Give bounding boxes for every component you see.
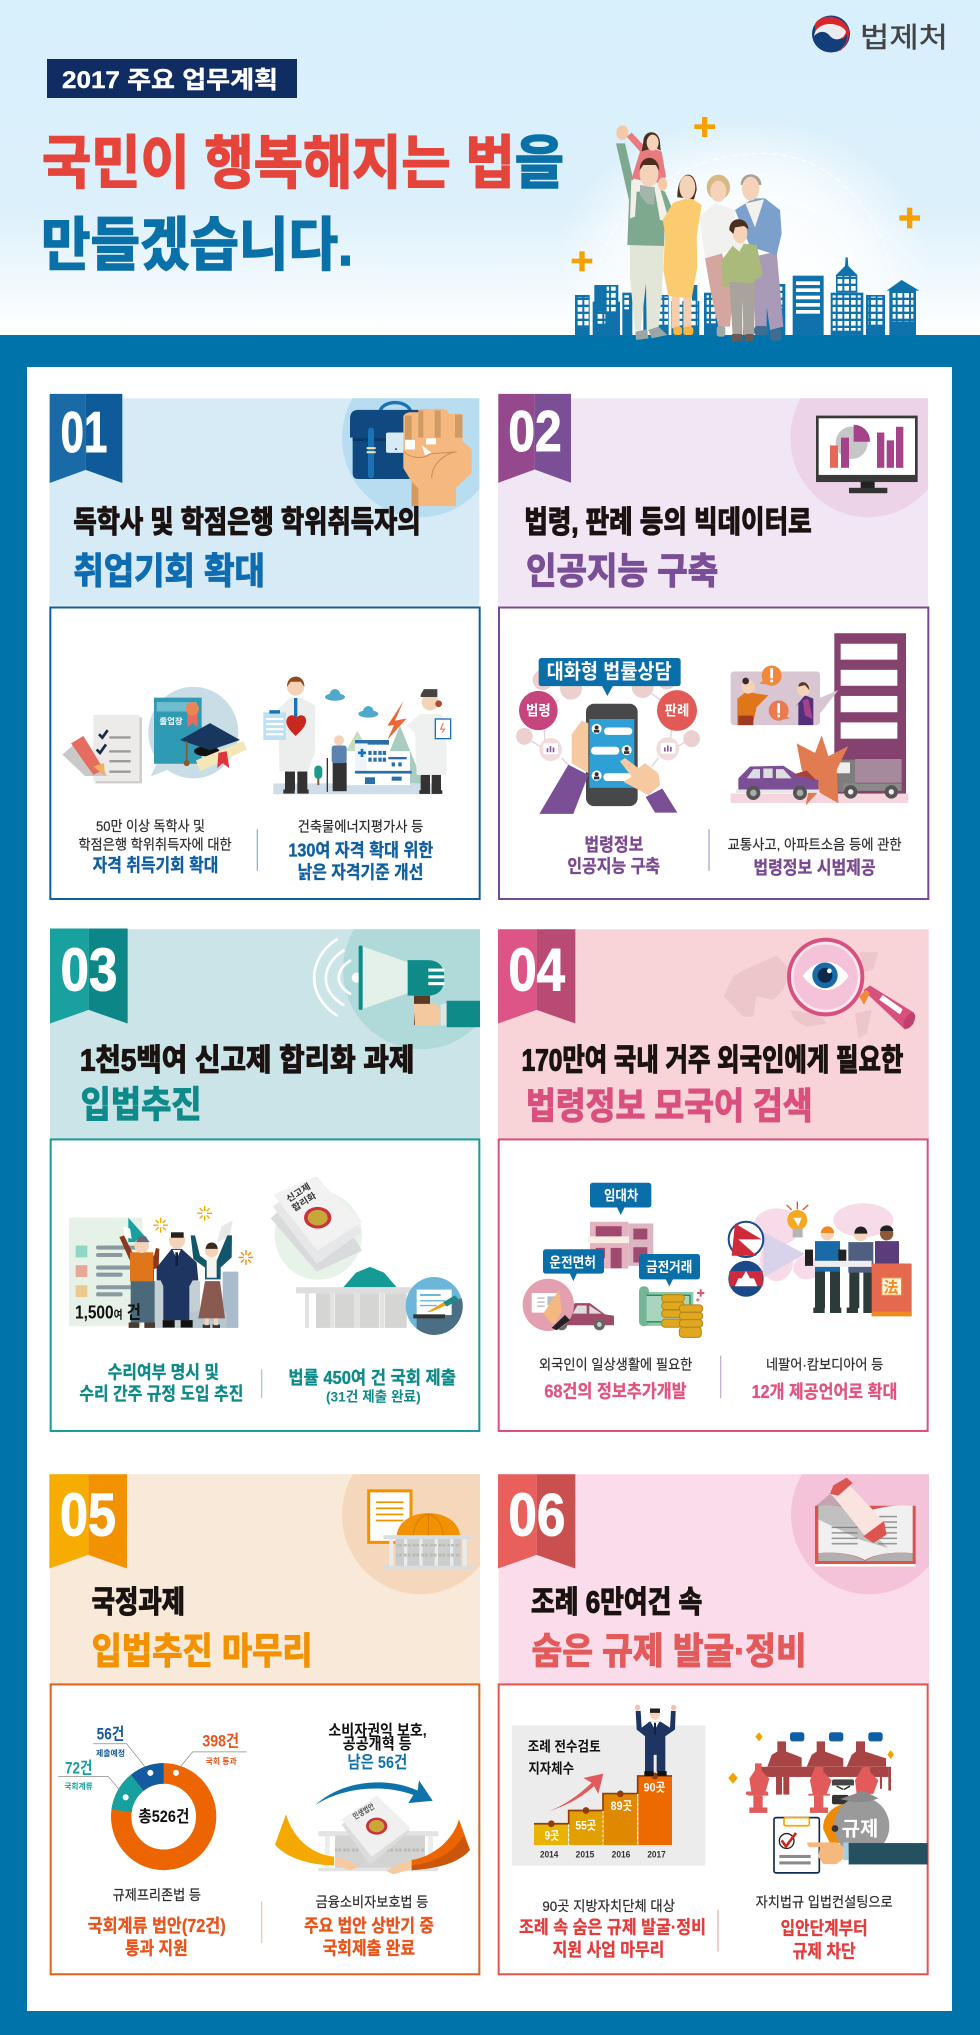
- heading 05: 국정과제: [92, 1585, 185, 1620]
- ribbon number 03: 03: [61, 936, 117, 1003]
- title: 국민이 행복해지는 법을: [42, 131, 564, 196]
- icon: orange plus signs: [572, 117, 920, 271]
- caption 01 right: [288, 818, 434, 882]
- heading 06: [531, 1585, 807, 1672]
- illustration: smartphone legal chatbot: 판례: [665, 703, 689, 719]
- tag: 2017 주요 업무계획: [47, 59, 297, 98]
- illustration: noise dispute and car accident: [731, 633, 908, 805]
- ribbon number 04: 04: [508, 936, 565, 1003]
- caption 06 right: 규제 차단: [793, 1941, 856, 1961]
- caption 05 left: 규제프리존법 등: [113, 1887, 201, 1903]
- icon: book and eraser: [815, 1478, 916, 1566]
- caption 01 right: 낡은 자격기준 개선: [298, 862, 423, 882]
- heading 05: [92, 1585, 313, 1672]
- caption 06 right: 입안단계부터: [781, 1918, 868, 1939]
- ribbon number 05: [49, 1474, 127, 1568]
- caption 05 right: 주요 법안 상반기 중: [304, 1916, 434, 1936]
- icon: diploma and graduation cap: [148, 687, 247, 778]
- bar chart: 조례 전수검토 지자체수: 지자체수: [528, 1760, 574, 1777]
- caption 03 right: 법률 450여 건 국회 제출: [288, 1368, 456, 1388]
- illustration: hands passing bills with arrow: [275, 1780, 470, 1874]
- panel 01 header band: [49, 398, 479, 606]
- heading 02: [524, 505, 812, 591]
- icon: megaphone: [314, 939, 480, 1027]
- caption 04 left: [539, 1356, 692, 1401]
- panel 04 header band: [498, 929, 929, 1139]
- caption 06 left: [519, 1898, 706, 1960]
- caption 01 left: 학점은행 학위취득자에 대한: [78, 836, 232, 853]
- callout: 남은 56건: [328, 1722, 427, 1772]
- caption 03 right: [288, 1368, 456, 1404]
- illustration: sealed bills and National Assembly: 합리화: [290, 1190, 318, 1213]
- illustration: rent, driving licence and finance: 운전면허: [549, 1254, 596, 1271]
- panel 03: [50, 928, 480, 1432]
- donut chart: 총526건: 56건: [97, 1726, 124, 1744]
- ribbon number 01: 01: [61, 400, 107, 465]
- callout: 남은 56건: 소비자권익 보호,: [328, 1722, 427, 1739]
- ribbon number 06: [498, 1474, 575, 1568]
- callout: 남은 56건: 남은 56건: [347, 1753, 407, 1772]
- content box 03: [51, 1139, 479, 1431]
- donut chart: 총526건: 총526건: [138, 1808, 189, 1826]
- ribbon number 06: 06: [508, 1481, 565, 1548]
- icon: diploma and graduation cap: 졸업장: [159, 716, 183, 726]
- illustration: rent, driving licence and finance: 임대차: [604, 1187, 638, 1203]
- boy: [729, 282, 755, 335]
- caption 04 left: 68건의 정보추가개발: [544, 1381, 687, 1401]
- grandmother: [705, 252, 733, 327]
- illustration: rent, driving licence and finance: 금전거래: [646, 1259, 692, 1275]
- caption 05 right: 국회제출 완료: [323, 1938, 415, 1958]
- illustration: regulation blocked at drafting stage: [728, 1732, 928, 1873]
- illustration: smartphone legal chatbot: [516, 658, 700, 814]
- bar chart: 조례 전수검토 지자체수: 90곳: [644, 1780, 665, 1795]
- panel 01: [49, 359, 498, 899]
- caption 05 right: [304, 1894, 434, 1958]
- donut chart: 총526건: 398건: [202, 1732, 239, 1750]
- donut chart: 총526건: 제출예정: [96, 1748, 125, 1758]
- icon: checklist and pencil: [62, 715, 142, 783]
- illustration: 1,500 reports with cheering people: 1,500여 건: [75, 1302, 141, 1322]
- title: 만들겠습니다.: [41, 213, 353, 278]
- illustration: smartphone legal chatbot: 법령: [526, 703, 551, 719]
- illustration: hospital, doctor, nurse and patient: [263, 677, 451, 794]
- caption 06 right: 자치법규 입법컨설팅으로: [756, 1894, 893, 1910]
- ribbon number 01: [50, 394, 122, 483]
- donut chart: 총526건: 국회계류: [64, 1781, 93, 1791]
- caption 02 left: [567, 835, 660, 877]
- heading 05: 입법추진 마무리: [92, 1630, 313, 1672]
- illustration: sealed bills and National Assembly: 신고제: [284, 1180, 312, 1204]
- skyline: [575, 257, 919, 337]
- panel 04: [498, 929, 929, 1431]
- illustration: multilingual search with flags: [728, 1201, 912, 1316]
- content box 06: [499, 1684, 928, 1974]
- tag: 2017 주요 업무계획: 2017 주요 업무계획: [62, 67, 278, 94]
- icon: monitor with charts: [816, 416, 918, 493]
- illustration: 1,500 reports with cheering people: [69, 1206, 253, 1328]
- panel 05 header band: [50, 1474, 480, 1684]
- caption 01 right: 130여 자격 확대 위한: [288, 840, 434, 860]
- bar chart: 조례 전수검토 지자체수: 9곳: [545, 1830, 559, 1843]
- caption 05 left: 통과 지원: [125, 1938, 188, 1958]
- caption 03 left: 수리여부 명시 및: [108, 1362, 219, 1382]
- illustration: smartphone legal chatbot: 대화형 법률상담: [547, 660, 672, 683]
- panel 06: [498, 1474, 929, 1976]
- caption 04 left: 외국인이 일상생활에 필요한: [539, 1356, 692, 1372]
- panel 06 header band: [499, 1474, 929, 1684]
- heading 01: [73, 505, 421, 591]
- panel 03 header band: [50, 929, 480, 1139]
- ribbon number 02: [498, 394, 571, 483]
- ribbon number 05: 05: [60, 1481, 116, 1548]
- caption 03 left: 수리 간주 규정 도입 추진: [79, 1384, 243, 1404]
- donut chart: 총526건: 국회 통과: [206, 1756, 237, 1766]
- bar chart: 조례 전수검토 지자체수: 조례 전수검토: [528, 1738, 601, 1755]
- white content sheet: [27, 367, 952, 2011]
- illustration: family and city skyline: [572, 117, 920, 342]
- donut chart: 총526건: 72건: [65, 1759, 92, 1778]
- icon: document and National Assembly: [369, 1491, 473, 1569]
- panel 02 header band: [498, 398, 928, 606]
- caption 06 right: [756, 1894, 893, 1961]
- caption 01 left: 50만 이상 독학사 및: [96, 818, 205, 834]
- content box 04: [499, 1139, 928, 1431]
- caption 02 left: 인공지능 구축: [567, 856, 660, 877]
- logo: 법제처: 법제처: [860, 22, 948, 53]
- donut chart: 총526건: [58, 1726, 247, 1860]
- panel 05: [49, 1474, 480, 1976]
- page header background: [0, 0, 980, 336]
- ribbon number 03: [50, 929, 128, 1023]
- caption 03 right: (31건 제출 완료): [326, 1388, 421, 1404]
- caption 02 right: [728, 836, 902, 878]
- heading 04: 170만여 국내 거주 외국인에게 필요한: [522, 1043, 903, 1077]
- man with raised arm: [630, 245, 664, 331]
- bar chart: 조례 전수검토 지자체수: 55곳: [575, 1818, 596, 1833]
- heading 01: 취업기회 확대: [73, 550, 265, 591]
- heading 02: 법령, 판례 등의 빅데이터로: [524, 505, 812, 540]
- heading 01: 독학사 및 학점은행 학위취득자의: [73, 505, 421, 540]
- caption 05 left: [88, 1887, 226, 1958]
- illustration: sealed bills and National Assembly: [271, 1177, 463, 1335]
- woman in yellow dress: [672, 295, 680, 328]
- heading 03: 1천5백여 신고제 합리화 과제: [80, 1043, 414, 1077]
- icon: briefcase and fist: [350, 403, 472, 506]
- bar chart: 조례 전수검토 지자체수: 89곳: [611, 1799, 632, 1813]
- caption 05 left: 국회계류 법안(72건): [88, 1916, 226, 1936]
- caption 06 left: 지원 사업 마무리: [553, 1940, 664, 1960]
- caption 02 right: 법령정보 시범제공: [753, 858, 876, 878]
- caption 01 right: 건축물에너지평가사 등: [298, 818, 423, 835]
- heading 04: 법령정보 모국어 검색: [526, 1085, 813, 1127]
- caption 02 left: 법령정보: [584, 835, 643, 855]
- title: [41, 131, 564, 278]
- caption 05 right: 금융소비자보호법 등: [316, 1894, 428, 1910]
- bar chart: 조례 전수검토 지자체수: 2014: [540, 1850, 558, 1860]
- bar chart: 조례 전수검토 지자체수: 2017: [647, 1850, 666, 1860]
- callout: 남은 56건: 공공개혁 등: [343, 1736, 412, 1753]
- logo: 법제처: [812, 16, 948, 53]
- grandfather: [753, 252, 783, 330]
- caption 03 left: [79, 1362, 243, 1404]
- heading 03: 입법추진: [81, 1084, 202, 1125]
- content box 01: [50, 607, 480, 899]
- illustration: hands passing bills with arrow: 민생법안: [351, 1801, 376, 1821]
- caption 01 left: [78, 818, 232, 876]
- illustration: man celebrating on top step: [635, 1705, 676, 1776]
- heading 06: 조례 6만여건 속: [531, 1585, 702, 1620]
- caption 06 left: 90곳 지방자치단체 대상: [542, 1898, 675, 1914]
- illustration: regulation blocked at drafting stage: 규제: [842, 1818, 878, 1841]
- caption 04 right: 12개 제공언어로 확대: [752, 1382, 897, 1402]
- bar chart: 조례 전수검토 지자체수: [512, 1725, 705, 1866]
- illustration: rent, driving licence and finance: [523, 1183, 704, 1337]
- bar chart: 조례 전수검토 지자체수: 2015: [576, 1850, 594, 1860]
- heading 03: [80, 1043, 414, 1125]
- caption 02 right: 교통사고, 아파트소음 등에 관한: [728, 836, 902, 853]
- heading 06: 숨은 규제 발굴·정비: [532, 1630, 807, 1672]
- icon: world map and magnifier with eye: [723, 940, 918, 1039]
- caption 06 left: 조례 속 숨은 규제 발굴·정비: [519, 1917, 706, 1938]
- caption 04 right: 네팔어·캄보디아어 등: [766, 1356, 883, 1372]
- content box 05: [51, 1684, 479, 1974]
- illustration: multilingual search with flags: 法: [884, 1276, 899, 1297]
- girl on shoulders: [627, 133, 666, 184]
- heading 04: [522, 1043, 903, 1127]
- heading 02: 인공지능 구축: [526, 550, 718, 591]
- ribbon number 04: [498, 929, 575, 1023]
- bar chart: 조례 전수검토 지자체수: 2016: [612, 1850, 630, 1860]
- content box 02: [499, 607, 928, 899]
- panel 02: [498, 359, 946, 899]
- caption 01 left: 자격 취득기회 확대: [93, 855, 218, 876]
- caption 04 right: [752, 1356, 897, 1402]
- ribbon number 02: 02: [508, 400, 562, 464]
